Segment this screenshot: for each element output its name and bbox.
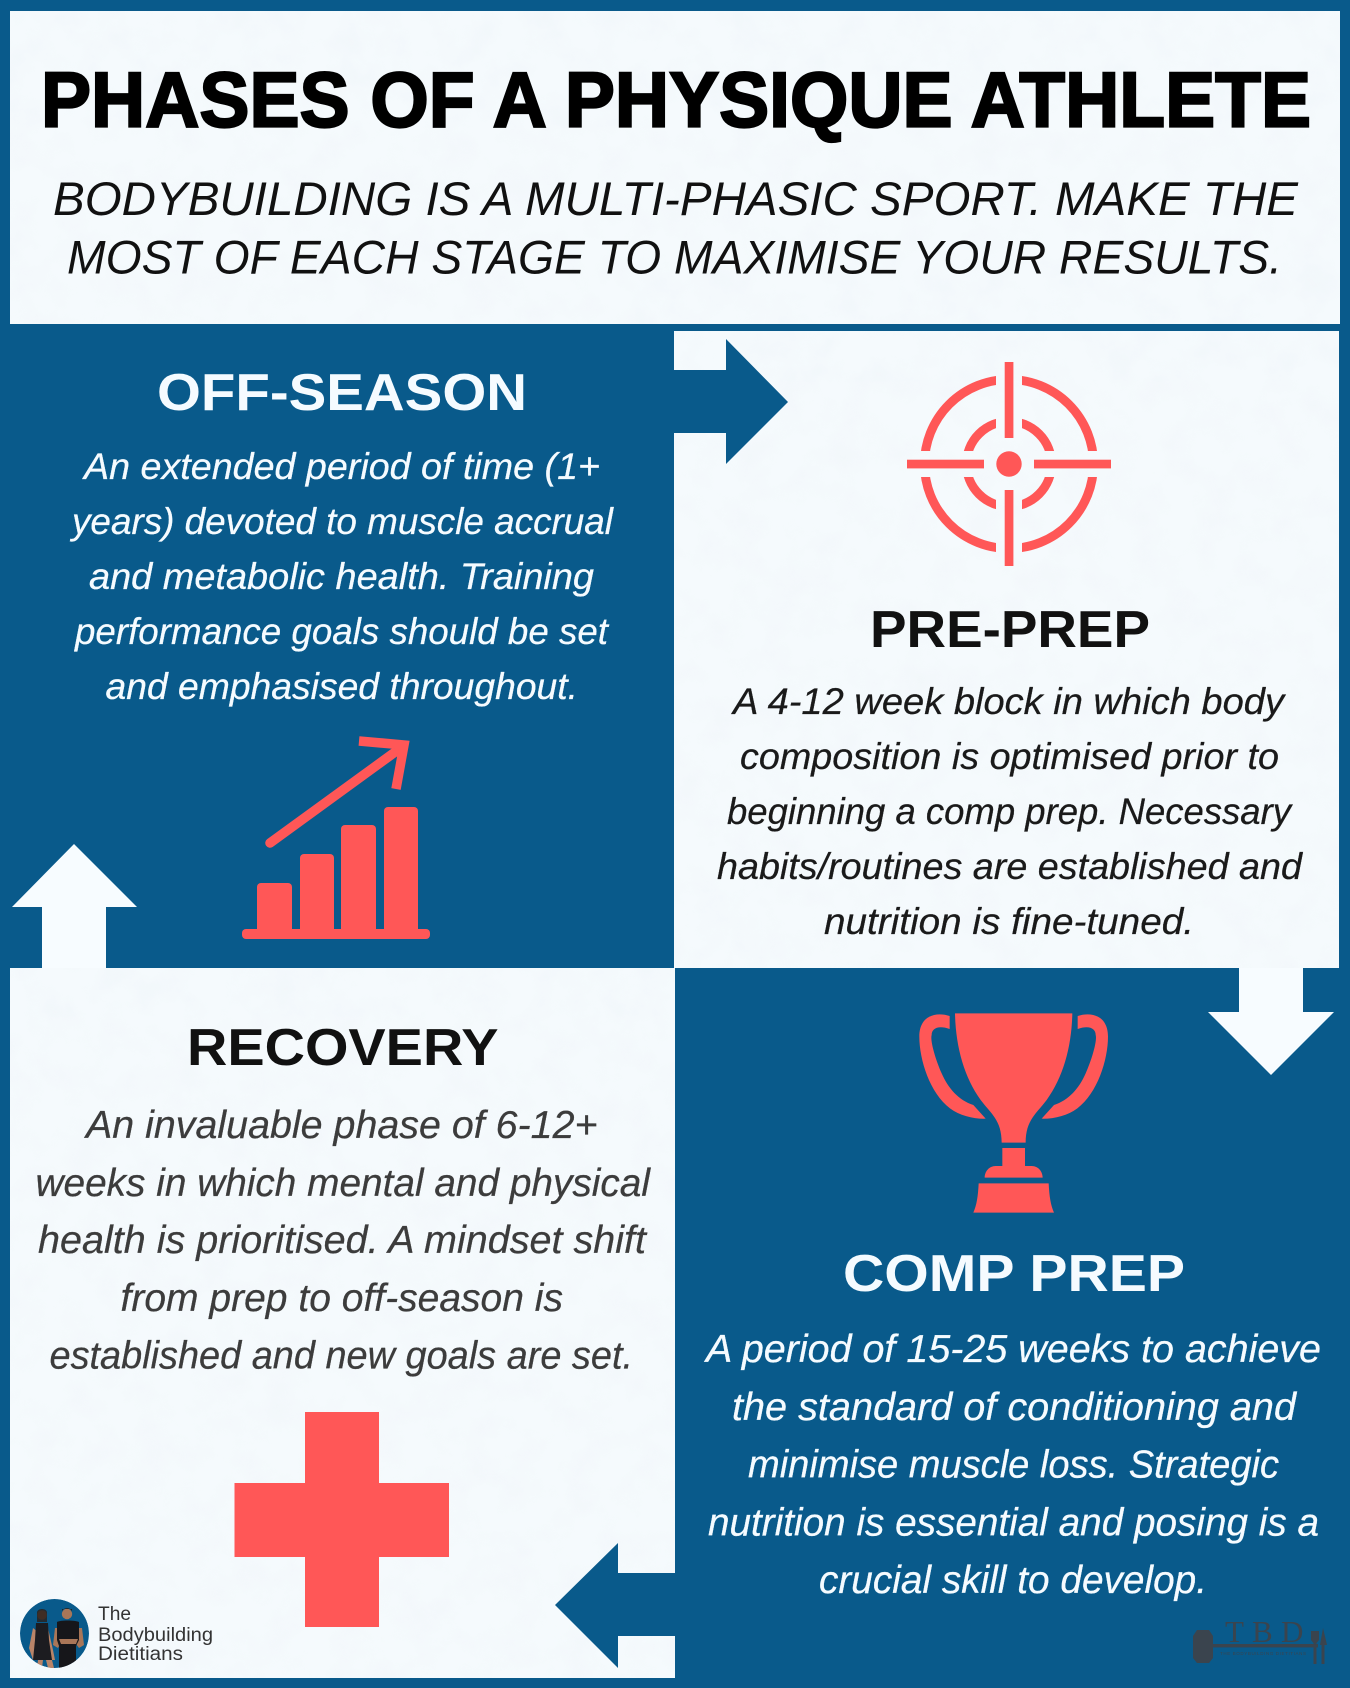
text: recovery description: established and new goals are set.	[50, 1334, 633, 1378]
logo: TBD barbell mark	[1193, 1614, 1327, 1664]
text: recovery description: weeks in which mental and physical	[36, 1162, 651, 1205]
text: recovery description	[36, 1104, 651, 1378]
icon: bar chart with rising arrow	[242, 741, 430, 939]
logo text: Bodybuilding	[98, 1625, 213, 1646]
arrow: comp prep to recovery	[555, 1543, 675, 1668]
panel: header	[10, 11, 1340, 324]
text: pre-prep description: A 4-12 week block in which body	[731, 681, 1287, 722]
text: comp prep description: the standard of conditioning and	[732, 1386, 1297, 1429]
text: comp prep description: A period of 15-25 weeks to achieve	[704, 1328, 1321, 1371]
arrow: recovery to off-season	[12, 844, 137, 968]
text: pre-prep description	[717, 681, 1303, 942]
logo text: Dietitians	[98, 1644, 183, 1665]
icon: medical cross	[234, 1412, 449, 1627]
panel content: pre-prep	[717, 362, 1303, 942]
logo: TBD barbell mark: THE BODYBUILDING DIETITIANS	[1220, 1651, 1306, 1656]
text: off-season description: years) devoted to muscle accrual	[69, 501, 615, 542]
icon: target crosshair	[907, 362, 1111, 566]
text: pre-prep description: beginning a comp prep. Necessary	[727, 791, 1293, 832]
panel content: recovery	[36, 1019, 651, 1627]
text: off-season description	[69, 446, 615, 707]
heading: recovery: RECOVERY	[187, 1019, 498, 1077]
text: pre-prep description: habits/routines are established and	[717, 846, 1303, 887]
title: PHASES OF A PHYSIQUE ATHLETE	[41, 56, 1311, 144]
panel content: comp prep	[704, 1013, 1321, 1602]
text: off-season description: and emphasised throughout.	[106, 666, 578, 707]
arrow: pre-prep to comp prep	[1208, 968, 1334, 1075]
logo text: The	[98, 1604, 131, 1625]
text: recovery description: health is prioritised. A mindset shift	[38, 1219, 648, 1262]
arrow: off-season to pre-prep	[674, 339, 788, 464]
panel: recovery	[10, 968, 675, 1678]
logo text	[98, 1604, 213, 1665]
text: pre-prep description: composition is optimised prior to	[740, 736, 1279, 777]
subtitle: BODYBUILDING IS A MULTI-PHASIC SPORT. MAKE THE	[53, 172, 1299, 225]
heading: comp prep: COMP PREP	[843, 1245, 1185, 1303]
text: off-season description: An extended period of time (1+	[82, 446, 600, 487]
text: comp prep description: crucial skill to develop.	[819, 1559, 1207, 1602]
text: comp prep description	[704, 1328, 1321, 1602]
subtitle: MOST OF EACH STAGE TO MAXIMISE YOUR RESULTS.	[67, 230, 1282, 284]
text: comp prep description: nutrition is essential and posing is a	[708, 1502, 1319, 1544]
panel: pre-prep	[674, 331, 1339, 968]
panel content: off-season	[69, 364, 615, 939]
text: off-season description: and metabolic health. Training	[89, 556, 594, 597]
logo: The Bodybuilding Dietitians	[20, 1599, 213, 1668]
text: recovery description: An invaluable phase of 6-12+	[84, 1104, 598, 1147]
heading: pre-prep: PRE-PREP	[870, 601, 1150, 659]
text: recovery description: from prep to off-season is	[120, 1277, 563, 1320]
heading: off-season: OFF-SEASON	[157, 364, 527, 422]
text: off-season description: performance goals should be set	[74, 611, 610, 652]
text: comp prep description: minimise muscle loss. Strategic	[748, 1444, 1279, 1486]
text: pre-prep description: nutrition is fine-tuned.	[824, 901, 1194, 942]
subtitle	[53, 172, 1299, 284]
icon: trophy	[919, 1013, 1108, 1213]
logo: TBD barbell mark: TBD	[1225, 1614, 1303, 1649]
logo photo: two athletes in circle	[20, 1599, 89, 1668]
